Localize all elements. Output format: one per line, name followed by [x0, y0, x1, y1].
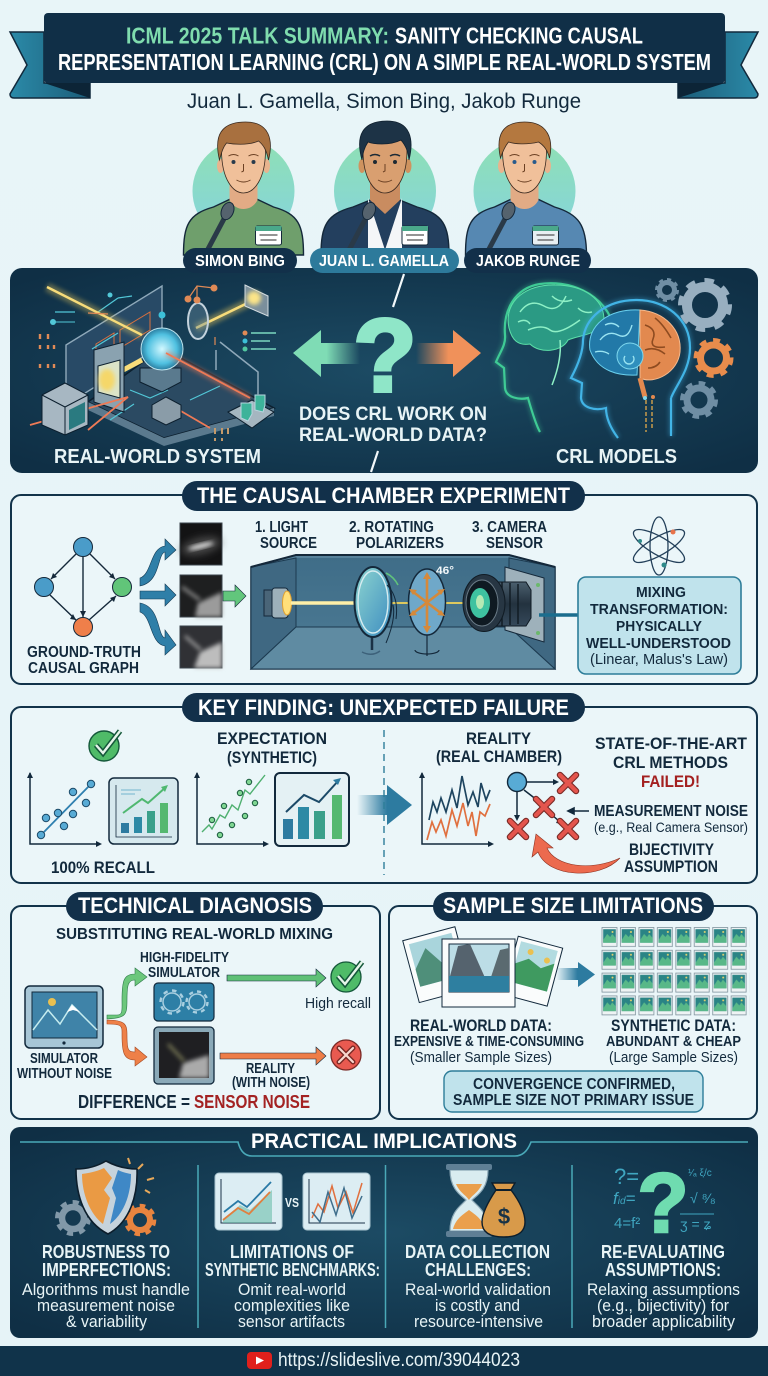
callout: convergence confirmed: SAMPLE SIZE NOT PRIMARY ISSUE [453, 1092, 694, 1109]
arrow: top curved [140, 539, 176, 586]
ground-truth causal graph [34, 538, 132, 636]
column 4: re-evaluating assumptions: RE-EVALUATING [601, 1242, 725, 1262]
step labels: 3. CAMERA [472, 519, 547, 536]
illustration: real-world system [30, 284, 276, 446]
causal chamber illustration [251, 555, 555, 669]
panel: technical diagnosis [11, 892, 380, 1119]
column 2: synthetic benchmarks: SYNTHETIC BENCHMARKS: [205, 1260, 380, 1280]
callout: mixing transformation: (Linear, Malus's Law) [590, 651, 728, 668]
heading: TECHNICAL DIAGNOSIS [78, 893, 312, 918]
label: synthetic data [606, 1017, 741, 1066]
arrow: measurement noise [568, 808, 589, 814]
chart card: smooth [215, 1173, 282, 1230]
sensor image tile 3 [180, 626, 222, 668]
label: high-fidelity simulator [140, 950, 229, 981]
authors line: Juan L. Gamella, Simon Bing, Jakob Runge [187, 90, 581, 113]
chart: scatter with fit line [27, 772, 102, 847]
label: reality with noise: REALITY [246, 1061, 295, 1077]
arrow: bottom curved [140, 603, 176, 655]
label: CRL models: CRL MODELS [556, 445, 677, 468]
step labels: SENSOR [486, 535, 543, 552]
label: ground-truth causal graph [27, 644, 141, 677]
label: reality with noise: (WITH NOISE) [232, 1075, 310, 1091]
name tag: Simon Bing: SIMON BING [195, 253, 285, 270]
question text: REAL-WORLD DATA? [299, 424, 487, 446]
title text: ICML 2025 TALK SUMMARY: [126, 22, 389, 48]
icon: question mark with formulas [613, 1156, 716, 1250]
icon: tablet simulator [25, 986, 103, 1048]
callout: mixing transformation: WELL-UNDERSTOOD [586, 635, 731, 652]
icon: money bag [482, 1183, 525, 1237]
icon: small gear [656, 280, 678, 300]
icon: green check [331, 962, 362, 992]
column 1: robustness: measurement noise [37, 1297, 175, 1315]
column 3: data collection: DATA COLLECTION [405, 1242, 550, 1262]
name tag: Jakob Runge [464, 248, 591, 273]
heading: PRACTICAL IMPLICATIONS [251, 1130, 517, 1153]
chart card: noisy [303, 1173, 370, 1230]
arrow: expectation to reality [357, 785, 412, 825]
column 2: synthetic benchmarks: Omit real-world [238, 1281, 346, 1299]
name tag: Simon Bing [183, 248, 297, 273]
heading: THE CAUSAL CHAMBER EXPERIMENT [197, 483, 571, 508]
dashboard card: synthetic bars [275, 773, 349, 846]
panel: key finding [11, 693, 757, 883]
icon: question mark with formulas: ? [637, 1156, 689, 1250]
icon: question mark with formulas: √ ⁸⁄₈ [690, 1190, 716, 1206]
arrow: orange to reality [220, 1047, 326, 1065]
column 1: robustness: Algorithms must handle [22, 1281, 190, 1299]
column 3: data collection: resource-intensive [414, 1313, 543, 1331]
label: reality: (REAL CHAMBER) [436, 748, 562, 766]
column 4: re-evaluating assumptions: broader applicability [592, 1313, 736, 1331]
callout: mixing transformation [578, 577, 741, 674]
callout: convergence confirmed: CONVERGENCE CONFIRMED, [473, 1076, 675, 1093]
question text: DOES CRL WORK ON [299, 403, 487, 425]
arrow: bijectivity curved [532, 834, 620, 873]
panel: causal chamber experiment [11, 481, 757, 684]
label: synthetic data: SYNTHETIC DATA: [611, 1017, 736, 1035]
photo: real-world centre [442, 939, 515, 1007]
label: bijectivity assumption: BIJECTIVITY [629, 841, 714, 859]
column 2: synthetic benchmarks: sensor artifacts [238, 1313, 345, 1331]
conclusion: sensor noise: DIFFERENCE = [78, 1092, 190, 1112]
label: high recall: High recall [305, 995, 371, 1012]
callout: CRL methods failed: STATE-OF-THE-ART [595, 735, 747, 753]
callout: CRL methods failed [595, 735, 747, 791]
label: real-world data [394, 1017, 584, 1066]
label: synthetic data: ABUNDANT & CHEAP [606, 1034, 741, 1050]
conclusion: sensor noise: SENSOR NOISE [194, 1092, 310, 1112]
title text [58, 22, 711, 75]
arrow: middle [140, 584, 176, 606]
question text [299, 403, 487, 446]
photo: real-world right [503, 936, 563, 1006]
name tag: Juan L. Gamella [310, 248, 459, 273]
icon: question mark with formulas: fid= [613, 1189, 636, 1208]
dividers [198, 1165, 572, 1328]
label: ground-truth causal graph: GROUND-TRUTH [27, 644, 141, 661]
icon: question mark with formulas: 4=f² [614, 1215, 640, 1232]
icon card: noisy sensor image [154, 1027, 214, 1084]
label: reality [436, 730, 562, 766]
column 1: robustness: ROBUSTNESS TO [42, 1242, 170, 1262]
dashed divider [383, 730, 385, 875]
polarizer angle label: 46° [436, 565, 454, 577]
icon: green check [89, 731, 120, 761]
icon: hourglass [446, 1164, 492, 1237]
label: real-world data: (Smaller Sample Sizes) [410, 1049, 552, 1066]
step labels: 2. ROTATING [349, 519, 434, 536]
synthetic data thumbnail grid [602, 927, 749, 1018]
divider: upper slash [393, 274, 404, 307]
column 1: robustness: IMPERFECTIONS: [42, 1260, 171, 1280]
icon: money bag: $ [498, 1204, 510, 1229]
subheading: SUBSTITUTING REAL-WORLD MIXING [56, 926, 333, 943]
column 4: re-evaluating assumptions: ASSUMPTIONS: [605, 1260, 721, 1280]
column 4: re-evaluating assumptions [587, 1156, 740, 1331]
arrow: green to high recall [227, 969, 326, 987]
label: high-fidelity simulator: HIGH-FIDELITY [140, 950, 229, 966]
label: high-fidelity simulator: SIMULATOR [148, 965, 220, 981]
column 1: robustness [22, 1158, 190, 1331]
icon: red cross [331, 1040, 361, 1070]
icon: question mark with formulas: ʒ = ʑ [680, 1216, 712, 1232]
label: bijectivity assumption [624, 841, 718, 876]
label: vs: VS [285, 1195, 299, 1210]
portrait: Juan L. Gamella [321, 121, 449, 255]
label: real-world data: EXPENSIVE & TIME-CONSUMING [394, 1034, 584, 1050]
callout: mixing transformation: TRANSFORMATION: [590, 601, 728, 618]
callout: convergence confirmed [444, 1071, 703, 1112]
label: reality: REALITY [466, 730, 531, 748]
column 2: synthetic benchmarks [205, 1173, 380, 1331]
arrow: right orange [416, 330, 481, 377]
label: simulator without noise [17, 1051, 112, 1082]
icon card: gears [154, 983, 214, 1021]
connector line [539, 613, 578, 617]
column 2: synthetic benchmarks: LIMITATIONS OF [230, 1242, 354, 1262]
column 3: data collection: Real-world validation [405, 1281, 551, 1299]
label: simulator without noise: WITHOUT NOISE [17, 1066, 112, 1082]
label: synthetic data: (Large Sample Sizes) [609, 1049, 738, 1066]
arrow: real to synthetic [556, 962, 595, 987]
step labels [255, 519, 547, 552]
name tag: Juan L. Gamella: JUAN L. GAMELLA [319, 253, 449, 270]
icon: question mark with formulas: ?= [614, 1164, 639, 1189]
footer bar [0, 1346, 768, 1376]
heading: SAMPLE SIZE LIMITATIONS [443, 893, 703, 918]
icon: large gear [681, 281, 729, 329]
conclusion: sensor noise [78, 1092, 310, 1112]
column 3: data collection: is costly and [435, 1297, 520, 1315]
arrow: green into chamber [223, 585, 246, 607]
portrait: Simon Bing [184, 122, 304, 255]
callout: mixing transformation: PHYSICALLY [616, 618, 702, 635]
label: measurement noise: (e.g., Real Camera Sensor) [594, 819, 748, 835]
link text: https://slideslive.com/39044023 [278, 1350, 520, 1371]
divider: lower slash [371, 451, 378, 472]
icon: broken shield with gears [57, 1158, 154, 1234]
icon: orange gear [696, 340, 732, 376]
illustration: CRL models heads and brains [496, 283, 690, 438]
label: real-world system: REAL-WORLD SYSTEM [54, 445, 261, 468]
heading: KEY FINDING: UNEXPECTED FAILURE [198, 695, 569, 720]
sensor image tile 2 [180, 575, 222, 617]
chart: green scatter with noisy line [194, 772, 269, 847]
panel: real-world system vs CRL models [10, 268, 758, 473]
arrow: left green [293, 330, 360, 377]
heading ornament [20, 1142, 748, 1156]
label: expectation: (SYNTHETIC) [227, 749, 317, 767]
title banner [10, 13, 758, 98]
callout: CRL methods failed: FAILED! [641, 773, 700, 791]
label: measurement noise [594, 803, 748, 835]
dashboard card: recall bars [109, 778, 178, 844]
icon: atom [629, 517, 689, 575]
step labels: 1. LIGHT [255, 519, 308, 536]
column 2: synthetic benchmarks: complexities like [234, 1297, 350, 1315]
column 3: data collection: CHALLENGES: [425, 1260, 531, 1280]
sensor image tile 1 [180, 523, 222, 565]
label: 100% recall: 100% RECALL [51, 859, 155, 877]
panel: practical implications [10, 1127, 758, 1338]
step labels: POLARIZERS [356, 535, 444, 552]
callout: CRL methods failed: CRL METHODS [613, 754, 728, 772]
label: ground-truth causal graph: CAUSAL GRAPH [28, 660, 139, 677]
label: reality with noise [232, 1061, 310, 1091]
icon: lower gear [682, 383, 716, 417]
chart: noisy reality lines [419, 772, 494, 847]
callout: mixing transformation: MIXING [636, 584, 686, 601]
portrait: Jakob Runge [466, 122, 586, 255]
name tag: Jakob Runge: JAKOB RUNGE [476, 253, 580, 270]
label: simulator without noise: SIMULATOR [30, 1051, 98, 1067]
label: expectation: EXPECTATION [217, 730, 327, 748]
label: real-world data: REAL-WORLD DATA: [410, 1017, 552, 1035]
panel: sample size limitations [389, 892, 757, 1119]
title text: SANITY CHECKING CAUSAL [395, 22, 643, 48]
photo: real-world left [403, 927, 471, 1003]
icon: question mark: ? [354, 298, 416, 413]
column 4: re-evaluating assumptions: Relaxing assumptions [587, 1281, 740, 1299]
column 1: robustness: & variability [66, 1313, 148, 1331]
arrows: branching green and orange [107, 968, 147, 1066]
icon: video play [247, 1352, 272, 1369]
causal network with failures [508, 772, 576, 837]
column 3: data collection [405, 1164, 551, 1331]
label: expectation [217, 730, 327, 767]
column 4: re-evaluating assumptions: (e.g., bijectivity) for [597, 1297, 729, 1315]
label: bijectivity assumption: ASSUMPTION [624, 858, 718, 876]
icon: question mark with formulas: ¹⁄ₐ ξ/c [688, 1168, 712, 1179]
step labels: SOURCE [260, 535, 317, 552]
